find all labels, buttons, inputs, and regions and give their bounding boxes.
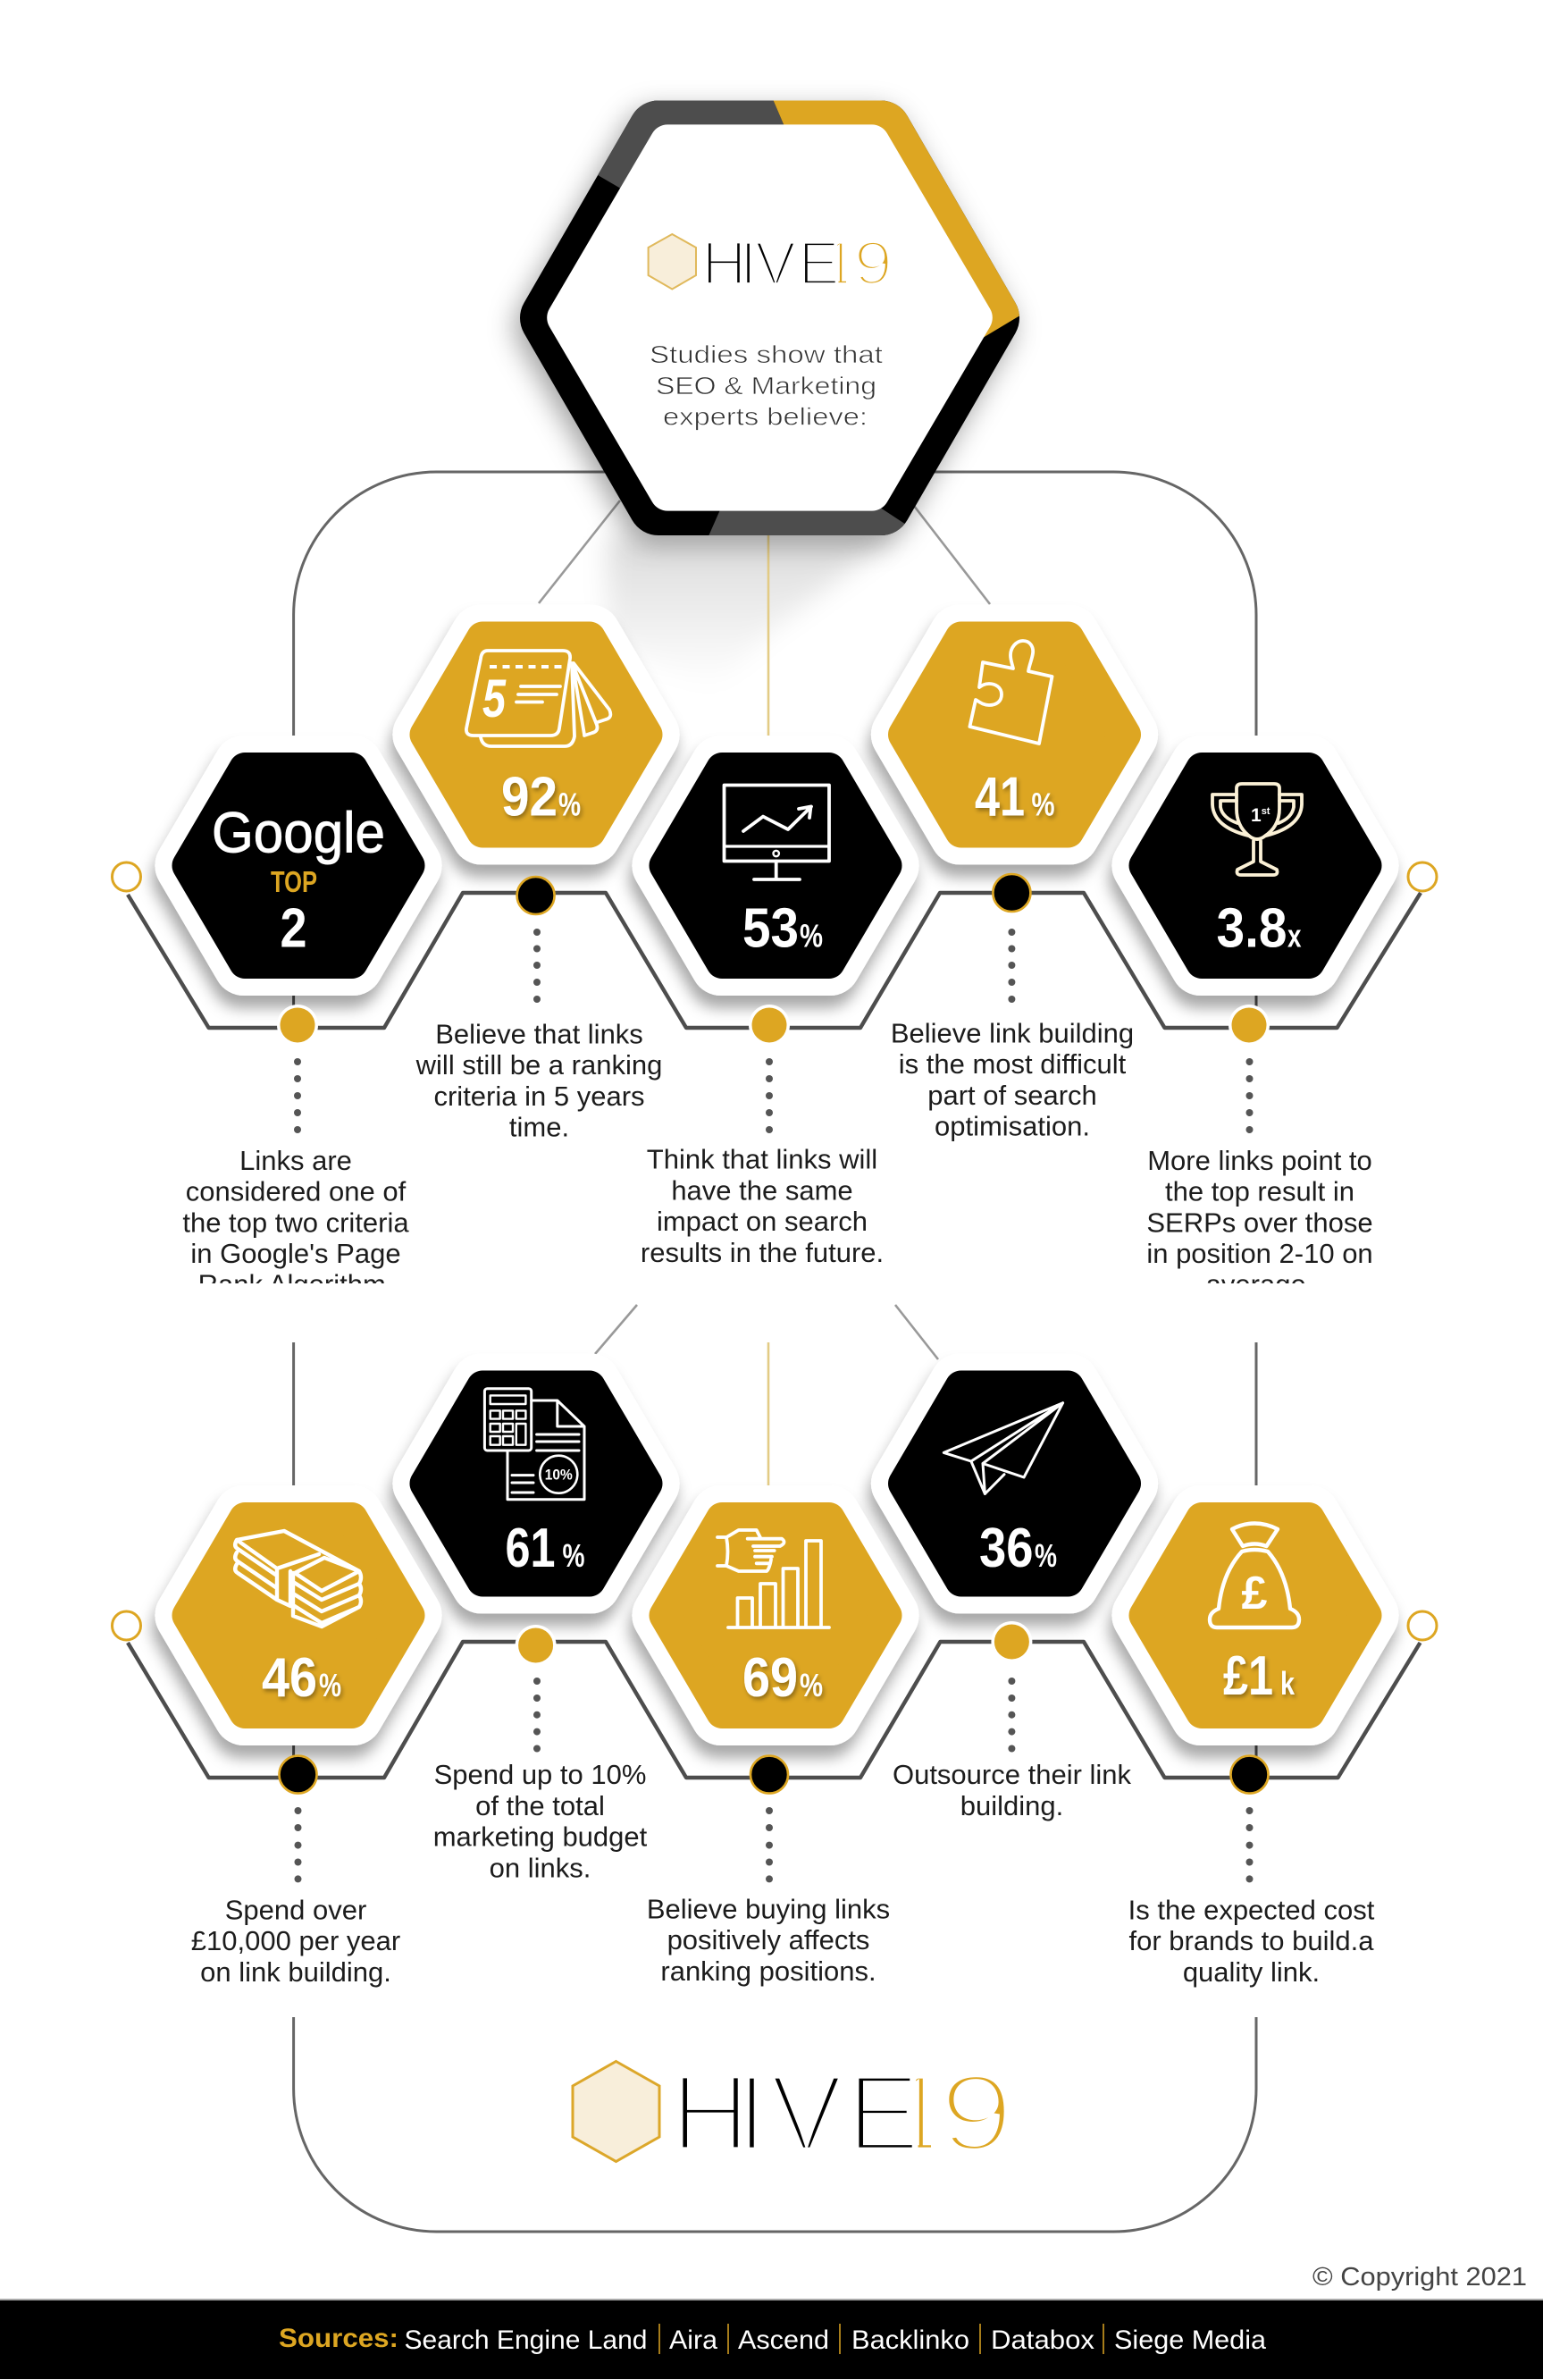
- sources list: Backlinko: [851, 2325, 969, 2355]
- top logo wordmark: [709, 243, 888, 283]
- stat: 92%: %: [558, 786, 581, 822]
- sources label: Sources:: [279, 2324, 398, 2353]
- stat: 53%: 53: [742, 897, 799, 960]
- stat: 1k pounds: £1: [1223, 1645, 1273, 1707]
- stat: 53%: %: [800, 917, 823, 955]
- connector: upper centre gold line: [767, 535, 769, 736]
- stat: 1k pounds: k: [1280, 1665, 1296, 1702]
- stat: 92%: 92: [501, 767, 558, 828]
- sources list: Aira: [669, 2325, 717, 2355]
- text: 3.8x: SERPs over those: [1146, 1207, 1373, 1238]
- hexagon: 53 percent monitor: [662, 766, 889, 965]
- middle right vertical line: [1254, 1342, 1258, 1485]
- main hexagon with logo and intro: [550, 130, 989, 505]
- hexagon: 3.8x trophy: [1142, 766, 1369, 965]
- node: 46 percent black dot: [279, 1756, 316, 1794]
- stat: 69%: 69: [742, 1647, 798, 1709]
- stat: 46%: %: [319, 1667, 341, 1703]
- node: 69 percent black dot: [751, 1756, 788, 1794]
- icon: pointing hand: [717, 1530, 784, 1571]
- dotted leader: 41 percent: [1008, 929, 1015, 1003]
- sources list: [404, 2324, 1266, 2355]
- dotted leader: 61 percent: [533, 1678, 541, 1752]
- text: 41 percent: optimisation.: [935, 1111, 1090, 1142]
- node: 41 percent black dot: [993, 874, 1030, 912]
- bottom logo icon: [573, 2061, 659, 2161]
- node: 36 percent gold dot: [991, 1621, 1032, 1662]
- connector: lower left diagonal: [595, 1305, 637, 1354]
- text: 61 percent: Spend up to 10%: [434, 1759, 646, 1790]
- top row connector line: [128, 893, 1421, 1028]
- stat: 41%: %: [1031, 786, 1054, 822]
- icon: bar chart: [728, 1541, 829, 1627]
- text: 3.8x: More links point to: [1147, 1145, 1372, 1176]
- text: 41 percent: Believe link building: [891, 1017, 1134, 1049]
- text: 3.8x: [1147, 1150, 1372, 1283]
- long shadow below main hexagon: [608, 536, 893, 688]
- node: top left ring: [113, 862, 141, 891]
- hexagon: 69 percent hand and bars: [662, 1516, 889, 1715]
- sources list: Search Engine Land: [404, 2325, 647, 2355]
- text: 61 percent: of the total: [475, 1790, 605, 1821]
- dotted leader: Google: [294, 1058, 301, 1133]
- top logo wordmark: HIVE: [702, 229, 840, 298]
- icon: puzzle piece: [969, 641, 1052, 744]
- icon: trophy: st: [1262, 806, 1270, 817]
- icon: money bag: [1210, 1523, 1299, 1627]
- node: bottom right ring: [1408, 1611, 1437, 1640]
- hexagon: 61 percent calculator: [423, 1383, 650, 1584]
- copyright: © Copyright 2021: [1312, 2263, 1527, 2292]
- text: Google top two: in Google's Page: [190, 1238, 401, 1269]
- text: 53 percent: results in the future.: [641, 1237, 884, 1268]
- dotted leader: 1k pounds: [1245, 1807, 1253, 1882]
- text: Google top two: Rank Algorithm.: [198, 1269, 393, 1300]
- bottom logo wordmark: 1: [889, 2052, 950, 2174]
- icon: calculator and document: 10%: [545, 1466, 573, 1484]
- dotted leader: 69 percent: [766, 1807, 773, 1882]
- icon: paper plane: [943, 1403, 1063, 1494]
- text: 53 percent: [641, 1144, 884, 1268]
- dotted leader: 3.8x: [1245, 1058, 1253, 1133]
- text: 53 percent: have the same: [671, 1174, 853, 1206]
- bottom logo wordmark: 9: [939, 2052, 1014, 2174]
- top row right stub: [1254, 992, 1258, 1010]
- Google wordmark: Google: [212, 801, 385, 865]
- stat: 3.8x: 3.8: [1217, 897, 1287, 960]
- node: 1k pounds black dot: [1231, 1756, 1269, 1794]
- text: 46 percent: Spend over: [225, 1895, 366, 1925]
- stat: 41%: 41: [975, 767, 1025, 828]
- stat: 61%: 61: [506, 1518, 556, 1579]
- footer sources bar: [0, 2299, 1543, 2379]
- intro text: experts believe:: [663, 402, 868, 431]
- top row left stub: [292, 992, 295, 1010]
- top logo wordmark: 9: [854, 229, 893, 298]
- text: 61 percent: [433, 1759, 648, 1883]
- bottom logo wordmark: HIVE: [671, 2052, 919, 2174]
- text: 3.8x: the top result in: [1165, 1176, 1354, 1207]
- bottom logo: [572, 2059, 1004, 2163]
- text: Google top two: Links are: [239, 1145, 352, 1176]
- text: 61 percent: marketing budget: [433, 1821, 648, 1853]
- node: 61 percent gold dot: [516, 1625, 557, 1666]
- text: 61 percent: on links.: [490, 1852, 591, 1883]
- text: 69 percent: positively affects: [667, 1924, 869, 1955]
- connector: upper right diagonal: [914, 506, 990, 604]
- bottom row right stub: [1254, 1743, 1258, 1759]
- icon: trophy: [1212, 784, 1302, 875]
- text: 69 percent: ranking positions.: [660, 1955, 876, 1987]
- icon: trophy: 1: [1251, 805, 1262, 826]
- text: 41 percent: is the most difficult: [899, 1048, 1127, 1080]
- text: 1k pounds: for brands to build.a: [1128, 1925, 1374, 1956]
- node: 3.8x gold dot: [1229, 1005, 1270, 1046]
- lower rounded frame line: [294, 2017, 1256, 2232]
- intro text: [650, 341, 883, 431]
- hexagon: 41 percent puzzle: [901, 635, 1128, 835]
- sources list: Siege Media: [1114, 2325, 1266, 2355]
- text: 36 percent: building.: [960, 1790, 1063, 1821]
- icon: monitor with rising chart: [724, 785, 829, 879]
- stat: 36%: %: [1035, 1537, 1057, 1574]
- node: 92 percent black dot: [517, 877, 555, 914]
- text: 36 percent: Outsource their link: [893, 1759, 1132, 1790]
- text: 69 percent: [647, 1893, 890, 1987]
- bottom row left stub: [292, 1743, 295, 1759]
- stat: 36%: 36: [979, 1518, 1033, 1579]
- text: 92 percent: will still be a ranking: [415, 1049, 662, 1081]
- sources list: Databox: [991, 2325, 1094, 2355]
- text: 3.8x: average.: [1206, 1269, 1313, 1300]
- stat: 46%: 46: [262, 1647, 317, 1709]
- node: top right ring: [1408, 862, 1437, 891]
- middle left vertical line: [292, 1342, 295, 1485]
- hexagon: 1k pounds money bag: [1142, 1516, 1369, 1715]
- icon: money bag: £: [1242, 1568, 1268, 1619]
- dotted leader: 46 percent: [295, 1807, 302, 1882]
- node: bottom left ring: [113, 1611, 141, 1640]
- text: 41 percent: [891, 1017, 1134, 1142]
- icon: stacks of banknotes: [235, 1531, 361, 1627]
- upper rounded frame line: [294, 472, 1256, 736]
- text: 1k pounds: Is the expected cost: [1128, 1895, 1375, 1925]
- stat: 3.8x: x: [1287, 917, 1301, 955]
- stat: 69%: %: [800, 1667, 823, 1703]
- connector: lower right diagonal: [895, 1305, 938, 1359]
- stat: 61%: %: [563, 1537, 584, 1574]
- text: Google top two: the top two criteria: [182, 1207, 409, 1238]
- dotted leader: 36 percent: [1008, 1678, 1015, 1752]
- text: Google top two: considered one of: [186, 1176, 407, 1207]
- bottom row connector line: [128, 1642, 1421, 1778]
- top logo wordmark: 1: [823, 229, 857, 298]
- text: 41 percent: part of search: [927, 1080, 1097, 1111]
- hexagon: 46 percent money: [185, 1516, 412, 1715]
- intro text: SEO & Marketing: [656, 372, 876, 399]
- sources list: Ascend: [738, 2325, 829, 2355]
- top logo icon: [649, 234, 696, 290]
- text: 3.8x: in position 2-10 on: [1146, 1238, 1373, 1269]
- text: 36 percent: [893, 1759, 1132, 1821]
- bottom logo wordmark: [683, 2077, 1004, 2149]
- connector: lower centre gold line: [767, 1342, 769, 1485]
- text: 92 percent: [415, 1019, 662, 1143]
- hexagon: 36 percent paper plane: [901, 1383, 1128, 1584]
- connector: upper left diagonal: [539, 500, 620, 603]
- icon: calendar: 5: [482, 669, 507, 728]
- text: 46 percent: [191, 1895, 400, 1988]
- text: 69 percent: Believe buying links: [647, 1893, 890, 1925]
- hexagon: Google top 2: [185, 766, 412, 965]
- text: 53 percent: impact on search: [657, 1206, 868, 1237]
- node: 53 percent gold dot: [749, 1005, 790, 1046]
- icon: calculator and document: [484, 1389, 584, 1500]
- text: 92 percent: criteria in 5 years: [433, 1081, 645, 1112]
- text: 53 percent: Think that links will: [647, 1144, 877, 1175]
- stat: 2: 2: [281, 897, 307, 960]
- text: 46 percent: on link building.: [200, 1956, 391, 1988]
- dotted leader: 92 percent: [533, 929, 541, 1003]
- label: TOP: TOP: [271, 866, 317, 899]
- text: 92 percent: time.: [509, 1112, 569, 1143]
- text: Google top two: [182, 1150, 409, 1283]
- intro text: Studies show that: [650, 341, 883, 368]
- hexagon: 92 percent calendar: [423, 635, 650, 835]
- node: Google gold dot: [277, 1005, 318, 1046]
- text: 46 percent: £10,000 per year: [191, 1925, 400, 1956]
- dotted leader: 53 percent: [766, 1058, 773, 1133]
- text: 92 percent: Believe that links: [435, 1019, 643, 1049]
- icon: calendar: [466, 651, 610, 746]
- text: 1k pounds: [1128, 1895, 1375, 1988]
- text: 1k pounds: quality link.: [1183, 1956, 1320, 1988]
